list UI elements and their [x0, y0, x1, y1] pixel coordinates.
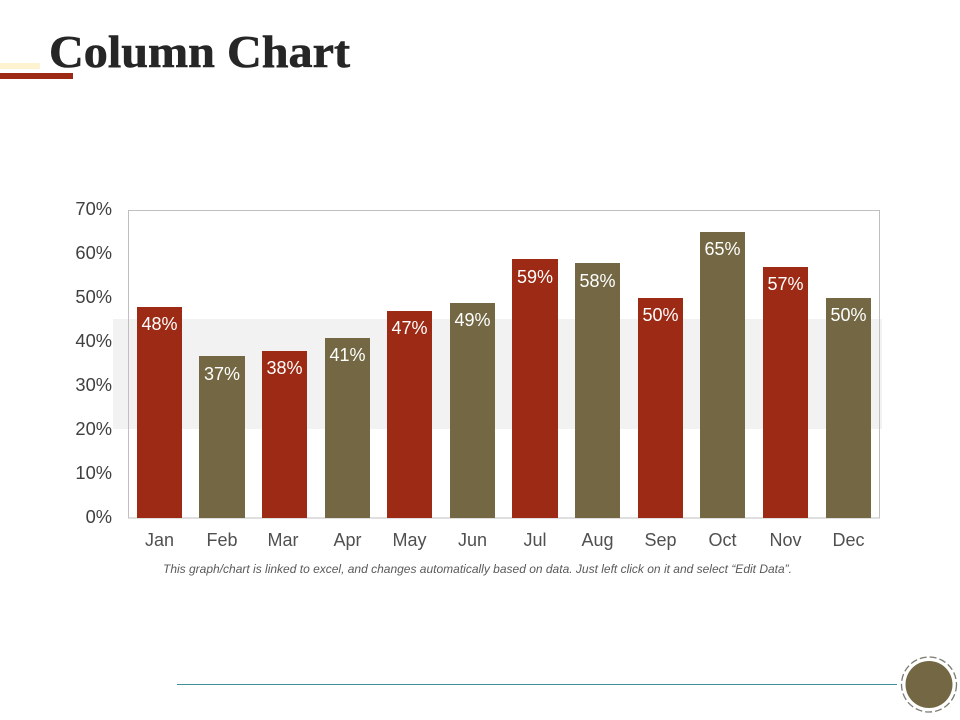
column bars with value labels	[137, 232, 871, 518]
value labels: 49%	[454, 310, 491, 330]
y axis labels: 30%	[75, 374, 112, 395]
title: Column Chart	[49, 26, 351, 77]
x axis labels: Jul	[523, 530, 547, 550]
value labels: 50%	[642, 305, 679, 325]
bar: May 47%	[387, 311, 432, 518]
y axis labels: 50%	[75, 286, 112, 307]
y axis labels: 10%	[75, 462, 112, 483]
bar: Feb 37%	[199, 356, 245, 518]
chart note: This graph/chart is linked to excel, and changes automatically based on data. Just left click on it and select “Edit Data”.	[163, 562, 792, 576]
x axis labels: Mar	[268, 530, 299, 550]
value labels: 47%	[391, 318, 428, 338]
background band	[113, 319, 882, 429]
x axis labels: Nov	[769, 530, 802, 550]
value labels: 41%	[329, 345, 366, 365]
x axis labels: Jan	[145, 530, 174, 550]
footer circle badge	[902, 657, 956, 712]
y axis labels: 20%	[75, 418, 112, 439]
x axis labels: Jun	[458, 530, 487, 550]
bar: Nov 57%	[763, 267, 808, 518]
bar: Aug 58%	[575, 263, 620, 518]
bar: Jan 48%	[137, 307, 182, 518]
x axis labels: Aug	[581, 530, 614, 550]
x axis labels: May	[392, 530, 427, 550]
y axis labels: 0%	[86, 506, 112, 527]
value labels: 48%	[141, 314, 178, 334]
bar: Oct 65%	[700, 232, 745, 518]
value labels: 58%	[579, 271, 616, 291]
y axis labels: 60%	[75, 242, 112, 263]
bar: Jul 59%	[512, 259, 558, 518]
y axis labels: 70%	[75, 198, 112, 219]
x axis labels	[145, 530, 865, 550]
value labels: 59%	[517, 267, 553, 287]
value labels: 37%	[204, 364, 240, 384]
bar: Sep 50%	[638, 298, 683, 518]
x axis labels: Apr	[333, 530, 362, 550]
value labels: 57%	[767, 274, 804, 294]
value labels	[141, 239, 867, 384]
y axis labels: 40%	[75, 330, 112, 351]
value labels: 50%	[830, 305, 867, 325]
bar: Apr 41%	[325, 338, 370, 518]
value labels: 65%	[704, 239, 741, 259]
x axis labels: Oct	[708, 530, 737, 550]
bar: Jun 49%	[450, 303, 495, 518]
chart plot frame	[128, 210, 880, 518]
value labels: 38%	[266, 358, 303, 378]
x axis labels: Sep	[644, 530, 677, 550]
x axis labels: Feb	[206, 530, 238, 550]
x axis labels: Dec	[832, 530, 865, 550]
title accent bars	[0, 63, 73, 79]
y axis labels	[75, 198, 112, 527]
bar: Dec 50%	[826, 298, 871, 518]
footer line	[177, 684, 897, 686]
bar: Mar 38%	[262, 351, 307, 518]
